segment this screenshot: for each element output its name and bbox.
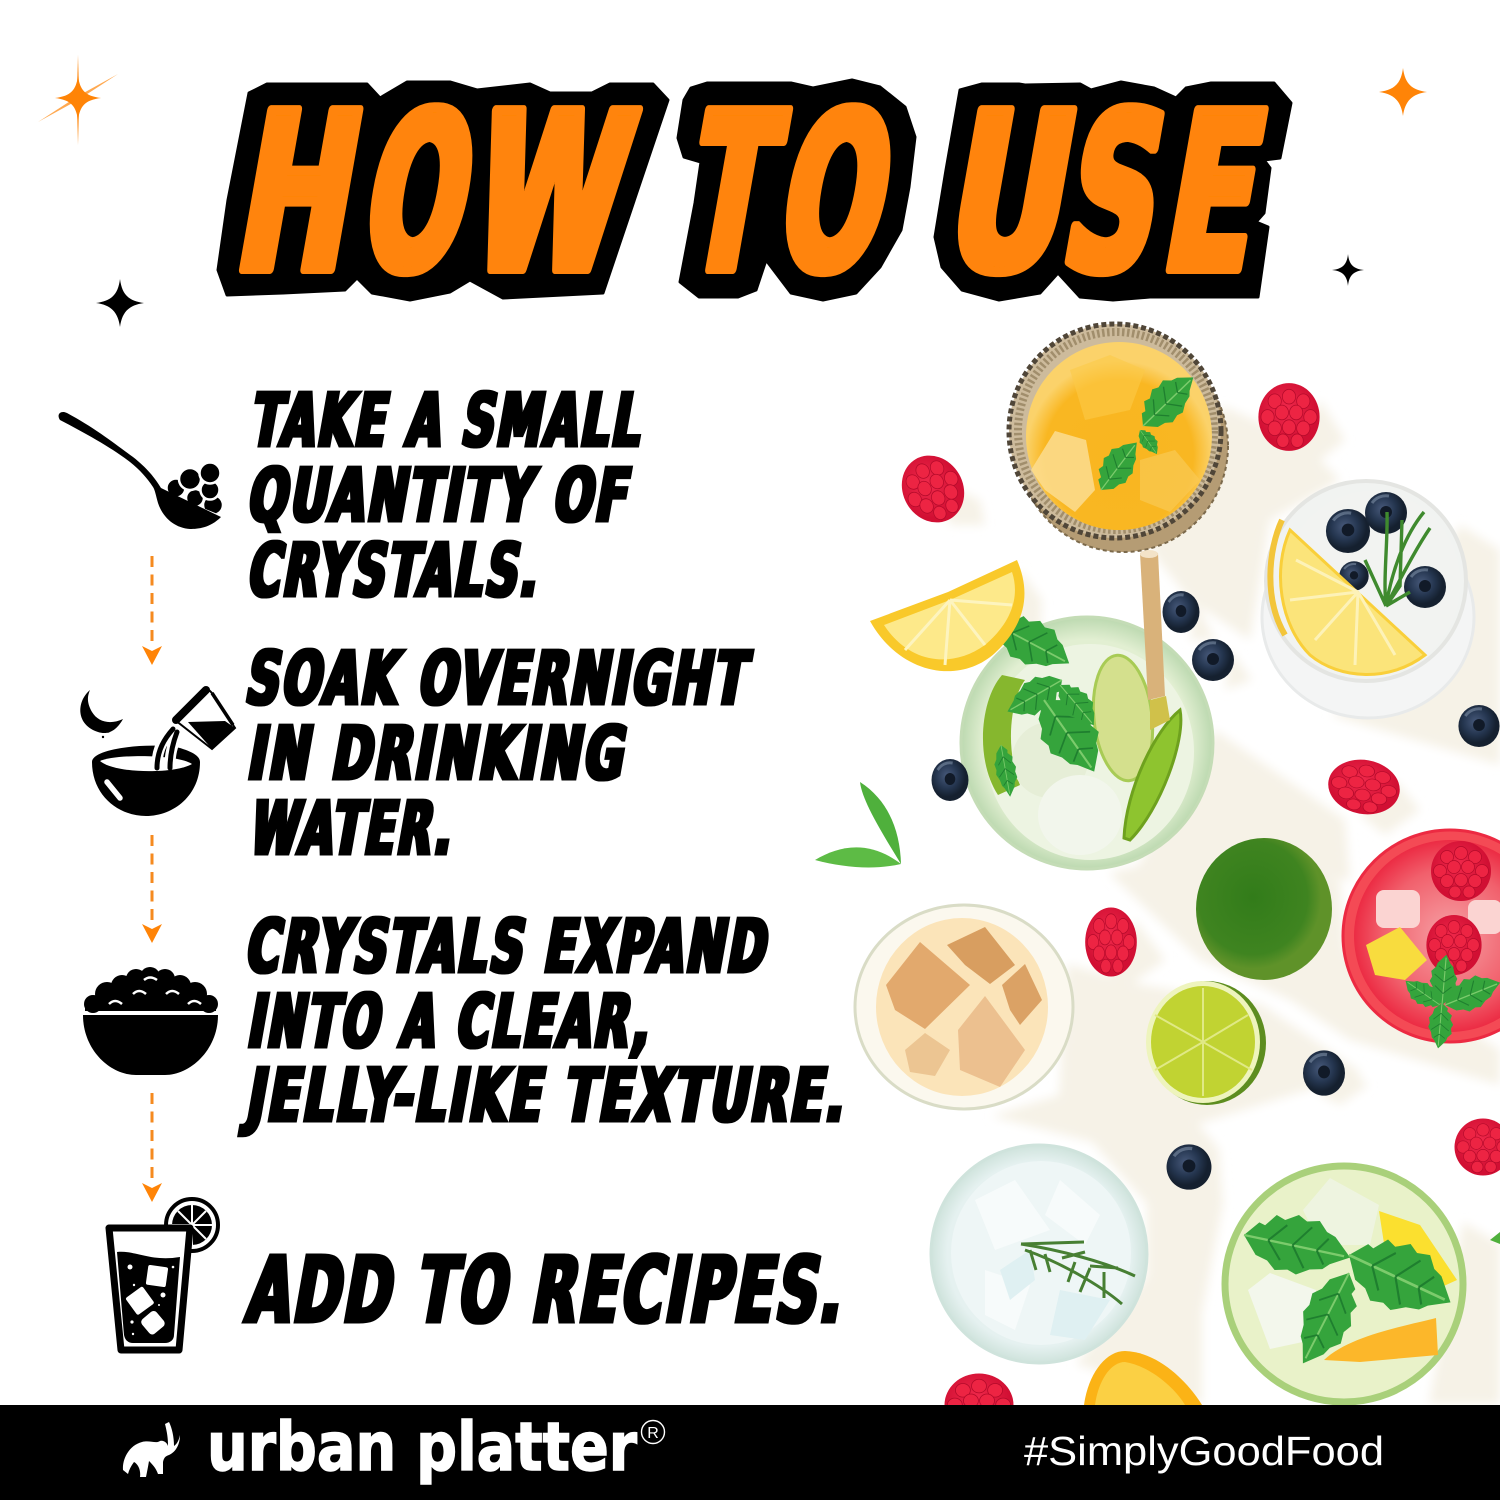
sparkle: top right orange [1379,68,1427,116]
footer bar [0,1405,1500,1500]
glass: green mint and lemon [1225,1166,1466,1402]
glass: blueberry, lemon and rosemary [1262,481,1474,718]
glass: lime and mint with straw [961,550,1213,869]
step 1 text: TAKE A SMALL [246,378,653,464]
sparkle: left black [96,279,144,327]
step 3 text: CRYSTALS EXPAND [241,904,778,990]
step 2 text [241,636,758,872]
registered mark [642,1420,664,1444]
registered mark: R [647,1425,659,1442]
glass: orange juice [1009,324,1228,552]
lemon bottom [1084,1351,1202,1405]
title letters: S [1049,68,1183,321]
step 2 text: SOAK OVERNIGHT [241,636,758,722]
glass: clear ice with rosemary [931,1145,1147,1363]
blueberries [932,591,1500,1190]
step 2 text: IN DRINKING [243,711,636,797]
title letters: T [672,67,797,321]
sparkle: top left orange [38,55,118,145]
title letters [223,66,1282,321]
hashtag: #SimplyGoodFood [1024,1428,1384,1474]
icon: soaking bowl with moon and pouring cup [80,688,235,816]
title letters: O [765,66,910,321]
glass: iced peach drink [855,905,1073,1109]
title letters: E [1150,66,1282,321]
sparkle: right black [1332,254,1364,286]
glass: red berry drink [1343,830,1500,1050]
lemon wedge [870,560,1024,671]
icon: elephant logo [123,1422,180,1477]
step 3 text [239,904,857,1139]
title outline [218,80,1291,300]
step 3 text: JELLY-LIKE TEXTURE. [239,1053,857,1139]
lime half [1146,981,1266,1105]
icon: spoon with crystals [59,412,223,529]
arrow 1 [142,556,162,665]
raspberries [890,383,1500,1437]
step 1 text: QUANTITY OF [243,453,640,539]
loose mint leaf [815,782,1500,1244]
cast shadows [935,400,1500,1404]
title letters: U [932,66,1093,321]
title letters: H [223,67,378,320]
title letters: O [349,67,492,321]
step 1 text: CRYSTALS. [243,528,550,614]
icon: drink with lemon slice [109,1199,218,1350]
brand name: urban platter [207,1408,637,1486]
whole lime [1196,838,1332,980]
step 2 text: WATER. [245,786,464,872]
arrow 3 [142,1093,162,1202]
step 3 text: INTO A CLEAR, [243,979,662,1065]
arrow 2 [142,835,162,943]
photo of drinks and fruit [815,324,1500,1436]
title letters: W [456,68,649,321]
title [218,66,1291,321]
step 1 text [243,378,653,614]
step 4 text: ADD TO RECIPES. [240,1237,857,1344]
icon: bowl of expanded crystals [83,967,218,1075]
